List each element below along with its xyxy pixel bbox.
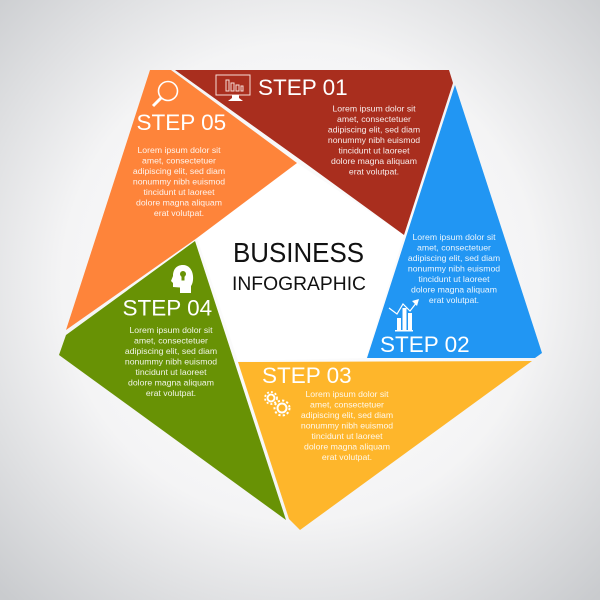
heading: step 02: STEP 02 — [380, 332, 470, 357]
heading: step 01: STEP 01 — [258, 75, 348, 100]
text: step 04 body: amet, consectetuer — [134, 336, 208, 346]
text: step 01 body: dolore magna aliquam — [331, 156, 417, 166]
text: step 02 body: dolore magna aliquam — [411, 284, 497, 294]
text: step 03 body: erat volutpat. — [322, 452, 372, 462]
text: step 03 body: adipiscing elit, sed diam — [301, 410, 393, 420]
text: step 01 body: amet, consectetuer — [337, 114, 411, 124]
text: step 02 body: nonummy nibh euismod — [408, 264, 500, 274]
title: BUSINESS — [233, 237, 364, 268]
icon: gears — [265, 392, 290, 416]
panel: step 03 — [238, 361, 532, 530]
text: step 04 body: nonummy nibh euismod — [125, 356, 217, 366]
text: step 04 body: tincidunt ut laoreet — [136, 367, 207, 377]
panel: step 02 — [367, 85, 542, 358]
text: step 03 body: Lorem ipsum dolor sit — [305, 389, 389, 399]
text: step 05 body: tincidunt ut laoreet — [144, 187, 215, 197]
panel: step 05 — [66, 70, 297, 330]
text: step 01 body: erat volutpat. — [349, 166, 399, 176]
text: step 05 body: nonummy nibh euismod — [133, 176, 225, 186]
text: step 04 body: erat volutpat. — [146, 388, 196, 398]
text: step 03 body: dolore magna aliquam — [304, 442, 390, 452]
panel: step 04 — [59, 241, 286, 520]
text: step 02 body: tincidunt ut laoreet — [418, 274, 490, 284]
title: INFOGRAPHIC — [232, 273, 366, 295]
text: step 02 body: adipiscing elit, sed diam — [408, 253, 500, 263]
text: step 04 body: adipiscing elit, sed diam — [125, 346, 217, 356]
text: step 03 body: nonummy nibh euismod — [301, 420, 393, 430]
text: step 04 body: dolore magna aliquam — [128, 378, 214, 388]
icon: magnifier — [153, 82, 178, 106]
icon: rising bar chart — [389, 299, 419, 332]
text: step 05 body: adipiscing elit, sed diam — [133, 166, 225, 176]
icon: head with lightbulb — [171, 265, 193, 293]
text: step 01 body: adipiscing elit, sed diam — [328, 124, 420, 134]
text: step 01 body: tincidunt ut laoreet — [338, 146, 410, 156]
text: step 02 body: erat volutpat. — [429, 295, 479, 305]
heading: step 04: STEP 04 — [122, 296, 212, 320]
heading: step 03: STEP 03 — [262, 363, 352, 388]
title — [232, 237, 366, 295]
text: step 01 body: nonummy nibh euismod — [328, 135, 420, 145]
text: step 01 body: Lorem ipsum dolor sit — [332, 104, 416, 114]
text: step 05 body: Lorem ipsum dolor sit — [137, 145, 221, 155]
panel: step 01 — [175, 70, 453, 235]
text: step 03 body: amet, consectetuer — [310, 400, 384, 410]
text: step 05 body: dolore magna aliquam — [136, 198, 222, 208]
text: step 04 body: Lorem ipsum dolor sit — [129, 325, 213, 335]
heading: step 05: STEP 05 — [136, 110, 226, 135]
text: step 02 body: Lorem ipsum dolor sit — [412, 232, 496, 242]
icon: monitor chart — [216, 75, 250, 101]
center white area — [197, 163, 404, 361]
text: step 05 body: erat volutpat. — [154, 208, 204, 218]
text: step 02 body: amet, consectetuer — [417, 242, 491, 252]
text: step 05 body: amet, consectetuer — [142, 156, 216, 166]
text: step 03 body: tincidunt ut laoreet — [312, 431, 383, 441]
